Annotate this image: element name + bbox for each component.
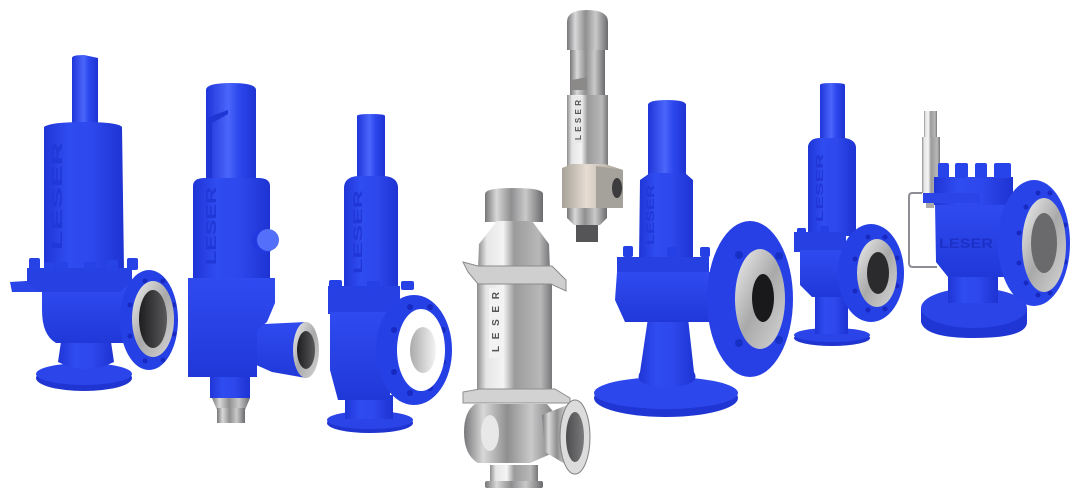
hygienic port xyxy=(542,400,590,474)
neck xyxy=(570,50,605,96)
valve 1: large blue valve with tall cap xyxy=(10,55,178,391)
silver actuator xyxy=(922,111,940,208)
bonnet logo: LESER xyxy=(351,189,365,274)
body xyxy=(188,278,275,377)
flange xyxy=(794,226,846,252)
lower clamp xyxy=(463,389,570,403)
silver tip xyxy=(212,398,250,423)
valve 2: threaded blue valve xyxy=(188,83,319,423)
neck xyxy=(345,395,393,419)
side plate xyxy=(923,193,980,203)
stem xyxy=(820,83,845,142)
valve 5: small stainless valve xyxy=(562,10,623,242)
bottom flange xyxy=(327,411,413,433)
bonnet flange xyxy=(27,268,132,292)
upper clamp xyxy=(463,262,566,291)
outlet flange xyxy=(998,180,1070,306)
body xyxy=(330,312,390,400)
bonnet xyxy=(808,138,856,236)
cone xyxy=(478,221,550,270)
lower collar xyxy=(567,208,607,225)
cap xyxy=(567,10,608,50)
outlet flange xyxy=(707,221,793,377)
stem xyxy=(357,114,385,180)
body xyxy=(935,203,1006,277)
hex body xyxy=(562,164,623,208)
cap logo: LESER xyxy=(49,142,66,250)
PTFE lining xyxy=(397,309,445,391)
threaded port xyxy=(293,322,319,378)
side port xyxy=(596,166,623,208)
bottom flange xyxy=(594,377,738,417)
bottom spigot xyxy=(485,465,543,488)
bonnet logo: LESER xyxy=(815,152,826,222)
valve 3: PTFE lined valve xyxy=(327,114,452,433)
valve 8: high-pressure blue valve with silver actuator xyxy=(909,111,1070,338)
cap xyxy=(206,83,256,182)
bypass tube xyxy=(909,193,937,267)
bonnet flange with bolts xyxy=(617,246,710,273)
bonnet xyxy=(344,176,398,290)
flange seat and bore xyxy=(132,281,174,357)
bottom flange xyxy=(921,288,1027,338)
tip xyxy=(576,225,598,242)
body xyxy=(615,272,720,322)
bottom flange xyxy=(794,328,870,346)
cylinder xyxy=(477,283,552,391)
neck xyxy=(639,318,696,388)
body xyxy=(800,250,850,297)
bonnet xyxy=(934,177,1013,205)
bowl body xyxy=(464,404,560,463)
stem xyxy=(72,55,98,125)
valve 4: stainless hygienic valve xyxy=(463,188,590,488)
body logo: LESER xyxy=(939,235,993,251)
flange seat and bore xyxy=(857,239,897,307)
label plate: LESER xyxy=(491,291,502,352)
body xyxy=(42,285,135,343)
flange seat and bore xyxy=(1022,198,1066,292)
cap cylinder xyxy=(44,122,124,270)
bolts xyxy=(29,258,138,271)
neck xyxy=(815,293,848,334)
bonnet xyxy=(639,173,693,260)
wing plate xyxy=(10,281,100,292)
neck xyxy=(58,335,114,369)
stem xyxy=(648,100,686,177)
neck xyxy=(948,275,998,303)
outlet flange xyxy=(120,270,178,370)
bonnet xyxy=(193,178,270,280)
cap xyxy=(485,188,543,222)
bolts xyxy=(329,280,414,290)
knob xyxy=(252,229,279,253)
cap bolts xyxy=(938,163,1011,178)
bottom flange xyxy=(36,363,132,391)
bonnet logo: LESER xyxy=(645,185,657,245)
flange xyxy=(328,286,400,314)
flange seat and bore xyxy=(735,249,785,349)
bonnet logo: LESER xyxy=(203,187,220,265)
bonnet xyxy=(567,95,608,168)
valve 6: large blue flanged valve xyxy=(594,100,793,417)
outlet xyxy=(245,322,306,378)
outlet flange xyxy=(838,224,904,322)
plate logo: LESER xyxy=(574,100,583,140)
valve 7: medium blue valve xyxy=(794,83,904,346)
outlet flange xyxy=(376,295,452,405)
lower stem xyxy=(210,377,250,398)
